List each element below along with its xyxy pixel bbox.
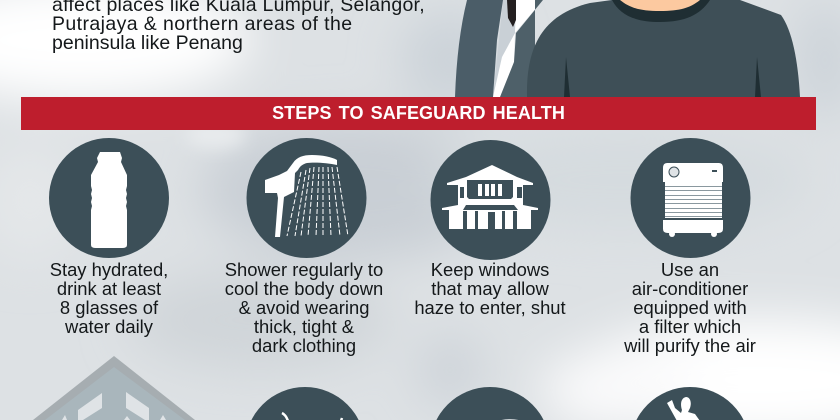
red heading band	[21, 97, 816, 130]
icon: bottom circle 3 with person	[636, 387, 744, 420]
heading: steps to safeguard health: STEPS TO SAFEGUARD HEALTH	[272, 103, 565, 123]
text: air conditioner: equipped with	[633, 297, 747, 318]
text: air conditioner	[624, 259, 756, 356]
text: windows: that may allow	[431, 278, 549, 299]
text: shower: thick, tight &	[254, 316, 354, 337]
intro text: peninsula like Penang	[52, 32, 243, 54]
text: stay hydrated: Stay hydrated,	[50, 259, 168, 280]
text: shower: & avoid wearing	[239, 297, 369, 318]
icon: air conditioner	[630, 138, 750, 258]
text: air conditioner: a filter which	[639, 316, 741, 337]
text: air conditioner: air-conditioner	[632, 278, 748, 299]
text: stay hydrated: water daily	[65, 316, 153, 337]
text: windows: haze to enter, shut	[414, 297, 566, 318]
icon: water bottle	[49, 138, 169, 258]
icon: house	[430, 140, 550, 260]
text: windows: Keep windows	[431, 259, 549, 280]
text: stay hydrated: drink at least	[57, 278, 161, 299]
illustration: faded building	[33, 356, 195, 420]
text: stay hydrated: 8 glasses of	[60, 297, 158, 318]
icon: shower	[246, 138, 366, 258]
text: stay hydrated	[50, 259, 168, 337]
text: windows	[414, 259, 566, 318]
text: air conditioner: Use an	[661, 259, 719, 280]
text: shower: Shower regularly to	[225, 259, 383, 280]
icon: bottom circle 1	[252, 387, 358, 420]
text: shower	[225, 259, 383, 356]
intro text: Putrajaya & northern areas of the	[52, 13, 352, 35]
icon: bottom circle 2	[436, 387, 544, 420]
text: shower: cool the body down	[225, 278, 383, 299]
intro text	[52, 0, 425, 54]
text: air conditioner: will purify the air	[624, 335, 756, 356]
illustration: man in suit	[455, 0, 543, 97]
text: shower: dark clothing	[252, 335, 356, 356]
illustration: man in dark shirt	[527, 0, 800, 97]
